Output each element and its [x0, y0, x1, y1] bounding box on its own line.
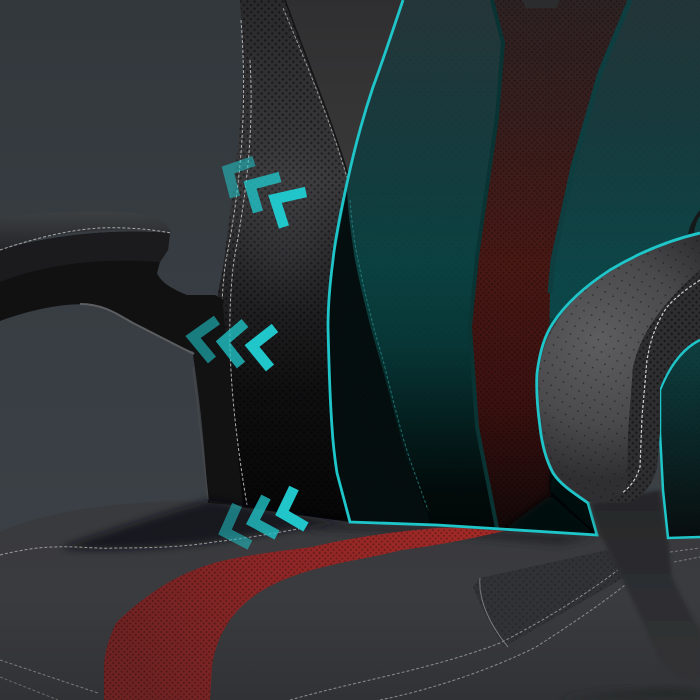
right armrest: support column — [590, 490, 700, 687]
seat side inset — [473, 550, 625, 647]
seat shadow beneath back — [60, 500, 350, 550]
arm stitching — [0, 228, 171, 250]
upper leather panel — [285, 0, 403, 178]
leather pad — [539, 235, 700, 503]
carbon side panel — [217, 0, 403, 526]
carbon trim — [597, 262, 700, 503]
seat red mesh stripe — [104, 528, 504, 700]
panel perforation — [350, 205, 392, 396]
red center stripe — [470, 0, 630, 530]
lumbar panel outline — [328, 0, 700, 535]
right teal section — [550, 276, 597, 318]
column below arm — [193, 298, 243, 506]
side highlight — [251, 150, 319, 290]
chevron group: seat arrows — [225, 488, 306, 545]
chair back: side panel — [217, 0, 403, 526]
trim stitching — [622, 280, 700, 493]
side stitching — [221, 20, 244, 505]
seat cushion — [0, 500, 700, 700]
teal highlighted lumbar panel — [320, 0, 700, 560]
seat side stitching — [290, 570, 618, 700]
wedge stitching — [350, 200, 428, 510]
left armrest — [0, 212, 243, 506]
lower left dark wedge — [329, 191, 405, 454]
small dark seam right — [688, 210, 700, 234]
chevron group: upper back arrows — [228, 161, 306, 227]
arm pad top — [0, 212, 172, 250]
right armrest pad — [539, 235, 700, 503]
chevron group: middle back arrows — [193, 320, 275, 368]
top notch — [522, 0, 560, 8]
seat seam stitching — [0, 528, 304, 555]
arm lip highlight — [80, 304, 194, 354]
red stripe seams — [470, 0, 503, 528]
arm underside — [0, 232, 224, 360]
right arm inner opening — [660, 340, 700, 562]
lower right seat shading — [560, 688, 700, 700]
corner shadow — [548, 480, 550, 490]
